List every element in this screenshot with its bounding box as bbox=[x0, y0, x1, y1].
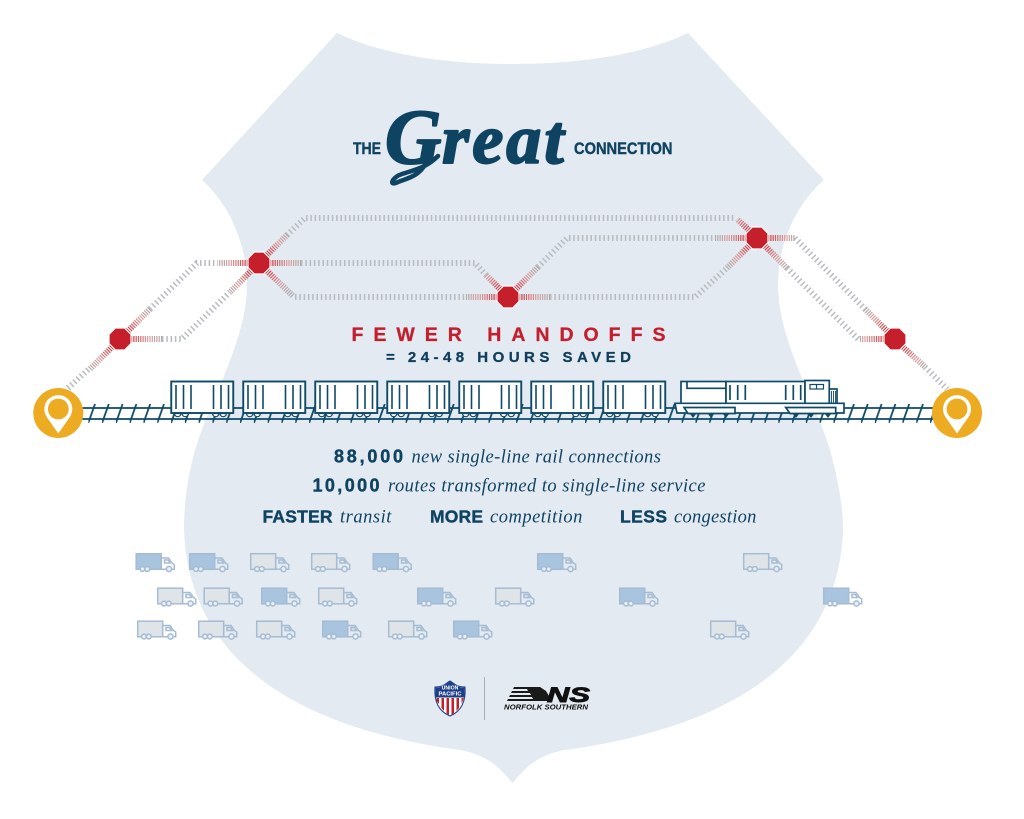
logo divider bbox=[484, 677, 486, 720]
stat: 88,000 connections: 88,000 bbox=[334, 446, 403, 466]
title swash bbox=[392, 156, 438, 183]
title word: the: THE bbox=[353, 140, 381, 158]
junction node bbox=[884, 328, 906, 350]
origin location pin bbox=[33, 388, 83, 438]
benefit: more competition bbox=[430, 506, 583, 528]
benefit: faster transit bbox=[262, 506, 392, 528]
locomotive bbox=[675, 380, 844, 418]
subheading: hours saved: = 24-48 HOURS SAVED bbox=[386, 349, 631, 366]
destination location pin bbox=[932, 388, 982, 438]
benefit: less congestion bbox=[620, 506, 757, 528]
rail route network bbox=[68, 218, 947, 389]
benefit: faster transit: FASTER bbox=[262, 506, 333, 526]
heading: fewer handoffs: FEWER HANDOFFS bbox=[352, 324, 666, 346]
junction node bbox=[746, 227, 768, 249]
stat: 10,000 routes: 10,000 bbox=[312, 476, 380, 496]
title word: connection: CONNECTION bbox=[574, 140, 672, 158]
train bbox=[171, 380, 844, 418]
freight cars bbox=[171, 382, 665, 417]
benefit: less congestion: LESS bbox=[620, 506, 667, 526]
title bbox=[353, 93, 672, 183]
junction node bbox=[497, 286, 519, 308]
benefit: less congestion: congestion bbox=[674, 508, 757, 528]
railway track bbox=[80, 404, 935, 423]
stat: 10,000 routes: routes transformed to single-line service bbox=[388, 476, 706, 496]
stat: 88,000 connections: new single-line rail connections bbox=[412, 448, 662, 468]
logo: norfolk southern: NS bbox=[547, 684, 590, 707]
logo: norfolk southern: NORFOLK SOUTHERN bbox=[504, 702, 589, 712]
statistics text bbox=[262, 446, 757, 528]
logo: union pacific bbox=[435, 681, 465, 716]
benefit: more competition: competition bbox=[490, 508, 583, 528]
title word: great: reat bbox=[442, 102, 567, 179]
title word: great: G bbox=[385, 93, 441, 180]
shield background bbox=[184, 33, 843, 783]
logo: union pacific: PACIFIC bbox=[438, 692, 462, 698]
logo: norfolk southern bbox=[504, 684, 590, 712]
benefit: faster transit: transit bbox=[340, 508, 392, 528]
benefit: more competition: MORE bbox=[430, 506, 483, 526]
logo: union pacific: UNION bbox=[442, 686, 459, 692]
truck fleet bbox=[136, 554, 862, 639]
junction node bbox=[109, 328, 131, 350]
junction node bbox=[248, 252, 270, 274]
